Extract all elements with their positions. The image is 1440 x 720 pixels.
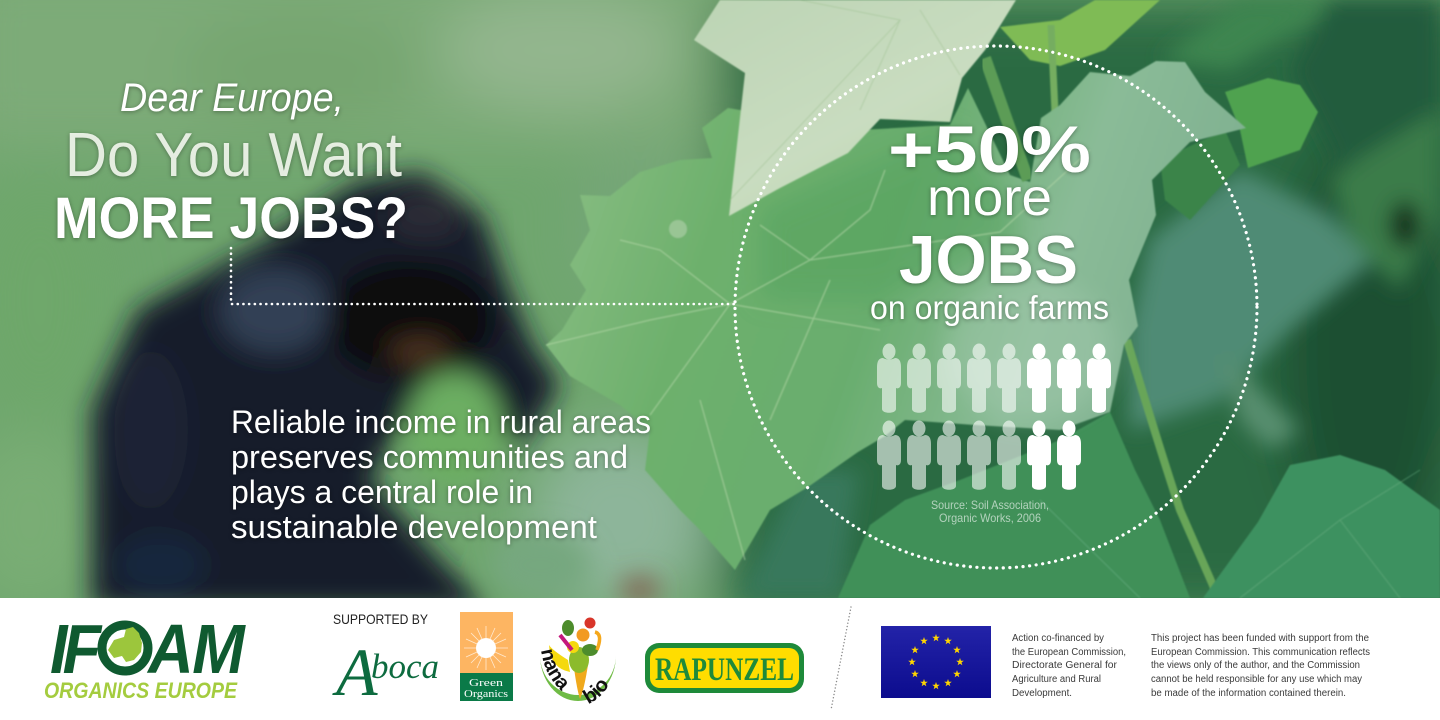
logo: IFOAM Organics Europe: ORGANICS EUROPE bbox=[44, 678, 238, 703]
title: Do You Want bbox=[65, 121, 402, 190]
title bbox=[54, 76, 408, 251]
body text: plays a central role in bbox=[231, 474, 533, 510]
bright background leaves and stems bbox=[1000, 0, 1318, 590]
logo: Rapunzel bbox=[645, 643, 804, 693]
body text: sustainable development bbox=[231, 509, 597, 545]
EU co-financing text: Action co-financed by bbox=[1012, 633, 1104, 644]
EU disclaimer text: the views only of the author, and the Commission bbox=[1151, 660, 1360, 671]
logo: IFOAM Organics Europe: IFOAM bbox=[50, 611, 246, 689]
dotted connector line bbox=[231, 248, 735, 304]
title: MORE JOBS? bbox=[54, 186, 408, 251]
EU disclaimer text bbox=[1151, 633, 1370, 699]
statistic: +50% more jobs bbox=[870, 112, 1109, 326]
water drop bbox=[669, 220, 687, 238]
supported by label: SUPPORTED BY bbox=[333, 611, 429, 627]
EU disclaimer text: cannot be held responsible for any use which may bbox=[1151, 674, 1362, 685]
EU co-financing text: Development. bbox=[1012, 688, 1072, 699]
EU disclaimer text: be made of the information contained therein. bbox=[1151, 688, 1346, 699]
vine stem bbox=[985, 58, 1028, 180]
logo: nana bio: nana bbox=[541, 649, 567, 691]
logo: Aboca: boca bbox=[371, 647, 439, 686]
EU disclaimer text: This project has been funded with support from the bbox=[1151, 633, 1369, 644]
logo: Aboca: A bbox=[336, 634, 378, 710]
title: Dear Europe, bbox=[120, 76, 344, 120]
logo: Green Organics: Green bbox=[469, 678, 504, 689]
bottom leaves bbox=[838, 412, 1440, 598]
body text: Reliable income in rural areas bbox=[231, 404, 651, 440]
body text: preserves communities and bbox=[231, 439, 628, 475]
footer band bbox=[0, 598, 1440, 720]
statistic: +50% more jobs: on organic farms bbox=[870, 289, 1109, 326]
statistic: +50% more jobs: +50% bbox=[888, 112, 1091, 186]
body text bbox=[231, 404, 651, 545]
source note: Organic Works, 2006 bbox=[939, 511, 1041, 525]
source note: Source: Soil Association, bbox=[931, 498, 1049, 512]
EU disclaimer text: European Commission. This communication reflects bbox=[1151, 647, 1370, 658]
EU co-financing text bbox=[1012, 633, 1126, 699]
dotted circle bbox=[735, 46, 1257, 568]
logo: nana bio: bio bbox=[582, 680, 608, 704]
upper pale leaf bbox=[694, 0, 1016, 216]
statistic: +50% more jobs: more bbox=[927, 169, 1052, 227]
logo: Rapunzel: RAPUNZEL bbox=[655, 652, 794, 688]
statistic: +50% more jobs: JOBS bbox=[899, 222, 1078, 298]
logo: nana bio bbox=[540, 618, 616, 704]
logo: Green Organics bbox=[460, 612, 513, 701]
dotted divider bbox=[831, 607, 851, 710]
logo: Green Organics: Organics bbox=[464, 689, 508, 700]
EU co-financing text: Agriculture and Rural bbox=[1012, 674, 1101, 685]
main vine leaf bbox=[546, 61, 1246, 570]
source note bbox=[931, 498, 1049, 525]
EU flag bbox=[881, 626, 991, 698]
blurred background foliage right bbox=[740, 0, 1440, 598]
pictogram: 15 people, 5 of each row faded bbox=[877, 344, 1111, 490]
blurred farmer bbox=[92, 172, 660, 610]
EU co-financing text: the European Commission, bbox=[1012, 647, 1126, 658]
EU co-financing text: Directorate General for bbox=[1012, 660, 1118, 671]
